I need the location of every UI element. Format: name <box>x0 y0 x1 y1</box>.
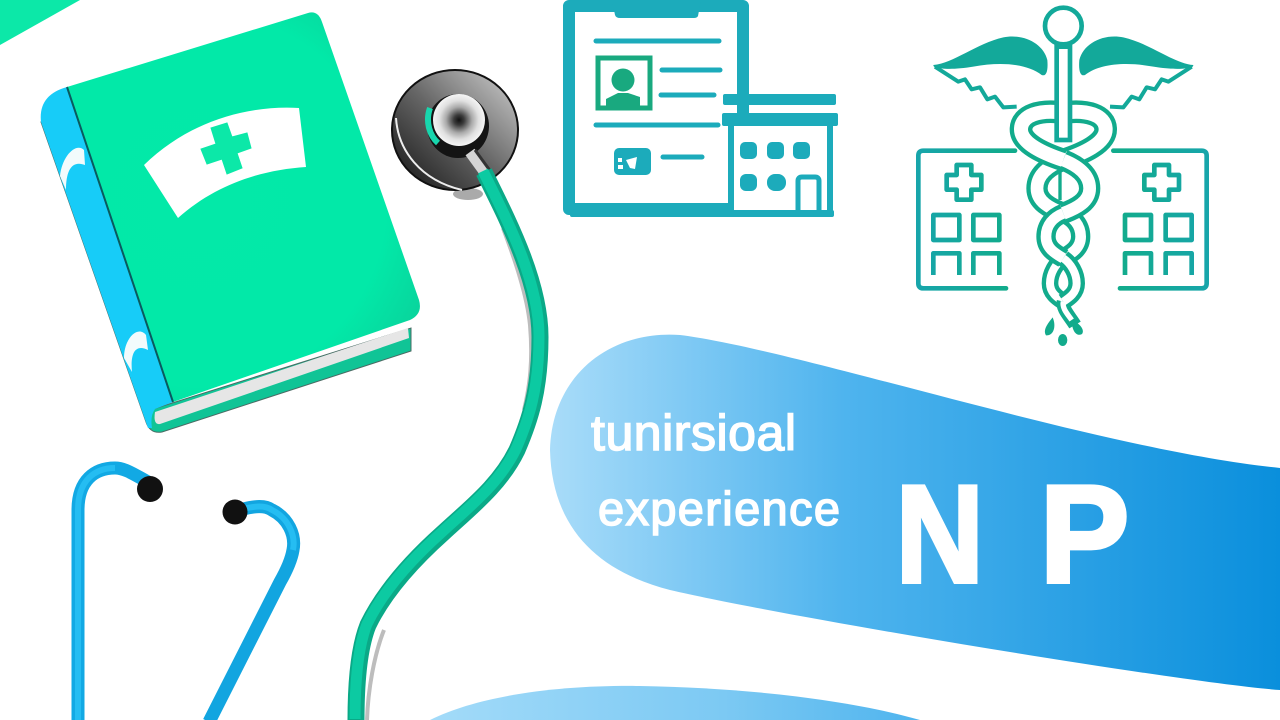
tube <box>356 172 540 720</box>
book pages <box>155 328 409 424</box>
icon: clipboard and clinic <box>569 0 838 217</box>
right ear tip <box>222 500 248 524</box>
snake B <box>1037 112 1106 302</box>
bottom blue shape <box>430 686 920 720</box>
clipboard clip <box>612 0 701 18</box>
decorative corner shape <box>0 0 80 45</box>
icon: stethoscope chest piece and tube <box>355 70 540 720</box>
left wing <box>933 36 1048 107</box>
tube highlight <box>355 171 539 719</box>
hospital crosses and windows <box>933 165 1192 275</box>
clinic building <box>570 94 838 217</box>
ball <box>1045 8 1082 44</box>
left ear tip <box>137 476 163 502</box>
head shadow <box>453 188 483 200</box>
chest piece <box>392 70 518 190</box>
book base and shadow <box>41 110 411 432</box>
left tube highlight <box>78 468 115 720</box>
right tube highlight <box>243 506 294 550</box>
right wing <box>1079 36 1193 107</box>
hospital outlines <box>918 151 1207 288</box>
metal stem <box>470 152 486 174</box>
profile photo <box>598 58 650 108</box>
clipboard board <box>569 6 743 209</box>
snake A <box>1021 112 1090 325</box>
diaphragm <box>433 94 485 146</box>
form lines <box>596 41 720 157</box>
panel: blue experience banner <box>550 335 1280 690</box>
book spine <box>41 87 173 428</box>
banner shape <box>550 335 1280 690</box>
lower staff <box>1055 167 1065 200</box>
teal arc <box>428 108 438 143</box>
icon: caduceus with hospitals <box>918 8 1207 346</box>
nurse cap emblem <box>144 108 306 218</box>
label: experience: experience <box>598 482 840 535</box>
drops <box>1045 317 1083 346</box>
letter P: P <box>1040 456 1129 611</box>
cap cross <box>201 123 251 174</box>
label: first line: tunirsioal <box>591 405 796 461</box>
right ear tube <box>209 506 294 720</box>
rim highlight <box>396 118 462 190</box>
tube shadow <box>367 228 531 720</box>
spine highlights <box>60 148 148 372</box>
letter N: N <box>896 456 984 612</box>
small badge <box>614 148 651 175</box>
upper staff <box>1057 47 1070 140</box>
icon: nursing book <box>41 12 420 432</box>
dark collar <box>427 94 489 158</box>
spine edge <box>67 87 173 402</box>
book cover <box>67 12 420 402</box>
icon: stethoscope ear tubes <box>78 468 294 720</box>
left ear tube <box>78 468 148 720</box>
